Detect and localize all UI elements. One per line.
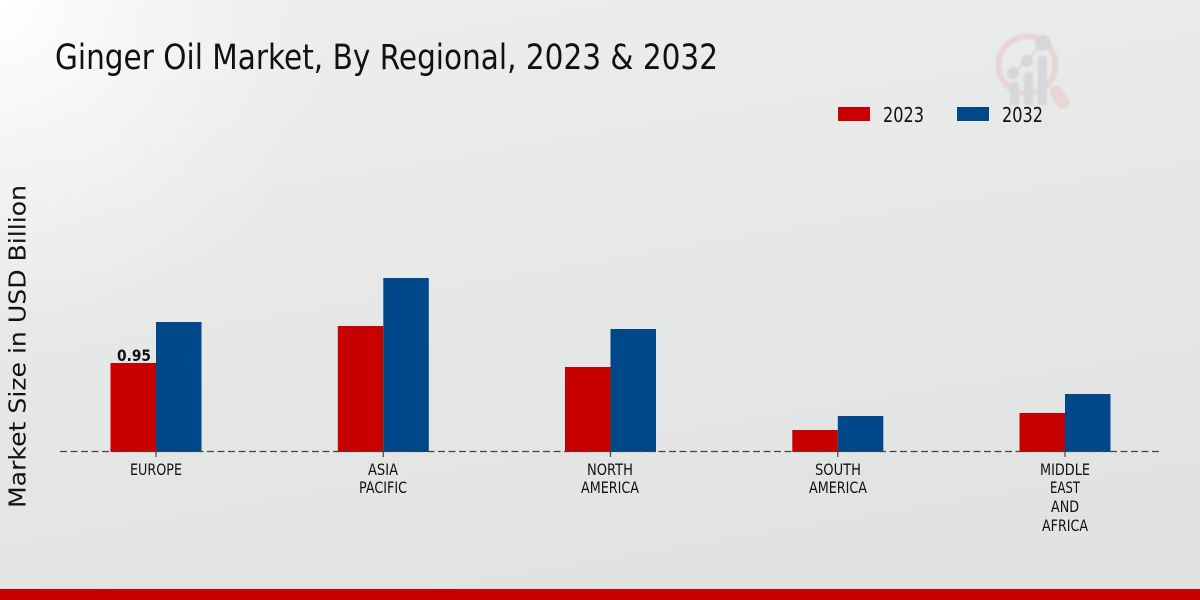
label: South America: [809, 460, 867, 497]
label: Middle East and Africa: MIDDLE: [1040, 460, 1090, 479]
legend swatch 2032: [957, 107, 989, 121]
group: Europe: [110, 322, 202, 452]
label: North America: AMERICA: [581, 478, 639, 497]
label: South America: AMERICA: [809, 478, 867, 497]
y axis title: Market Size in USD Billion: [4, 185, 32, 508]
label: Middle East and Africa: AFRICA: [1042, 516, 1088, 535]
watermark logo icon: [998, 35, 1063, 105]
bottom bar: [0, 589, 1200, 600]
label: Europe: EUROPE: [130, 460, 182, 479]
label: Middle East and Africa: AND: [1051, 497, 1079, 516]
baseline axis: [60, 452, 1160, 457]
legend label 2023: 2023: [883, 103, 924, 127]
label: Asia Pacific: [359, 460, 407, 497]
group: South America: [792, 416, 883, 452]
label: Middle East and Africa: [1040, 460, 1090, 535]
group: Asia Pacific: [338, 278, 429, 452]
label: South America: SOUTH: [815, 460, 861, 479]
title: Ginger Oil Market, By Regional, 2023 & 2032: [55, 38, 718, 78]
label: Middle East and Africa: EAST: [1050, 478, 1080, 497]
group: Middle East and Africa: [1020, 394, 1110, 452]
legend label 2032: 2032: [1002, 103, 1043, 127]
label: North America: [581, 460, 639, 497]
bar chart: [110, 278, 1110, 452]
group: North America: [565, 329, 656, 452]
category labels: [130, 460, 1090, 535]
label: North America: NORTH: [587, 460, 633, 479]
legend swatch 2023: [838, 107, 870, 121]
label: Asia Pacific: ASIA: [368, 460, 398, 479]
label: Asia Pacific: PACIFIC: [359, 478, 407, 497]
data label 0.95: 0.95: [117, 346, 151, 365]
legend: [838, 103, 1043, 127]
